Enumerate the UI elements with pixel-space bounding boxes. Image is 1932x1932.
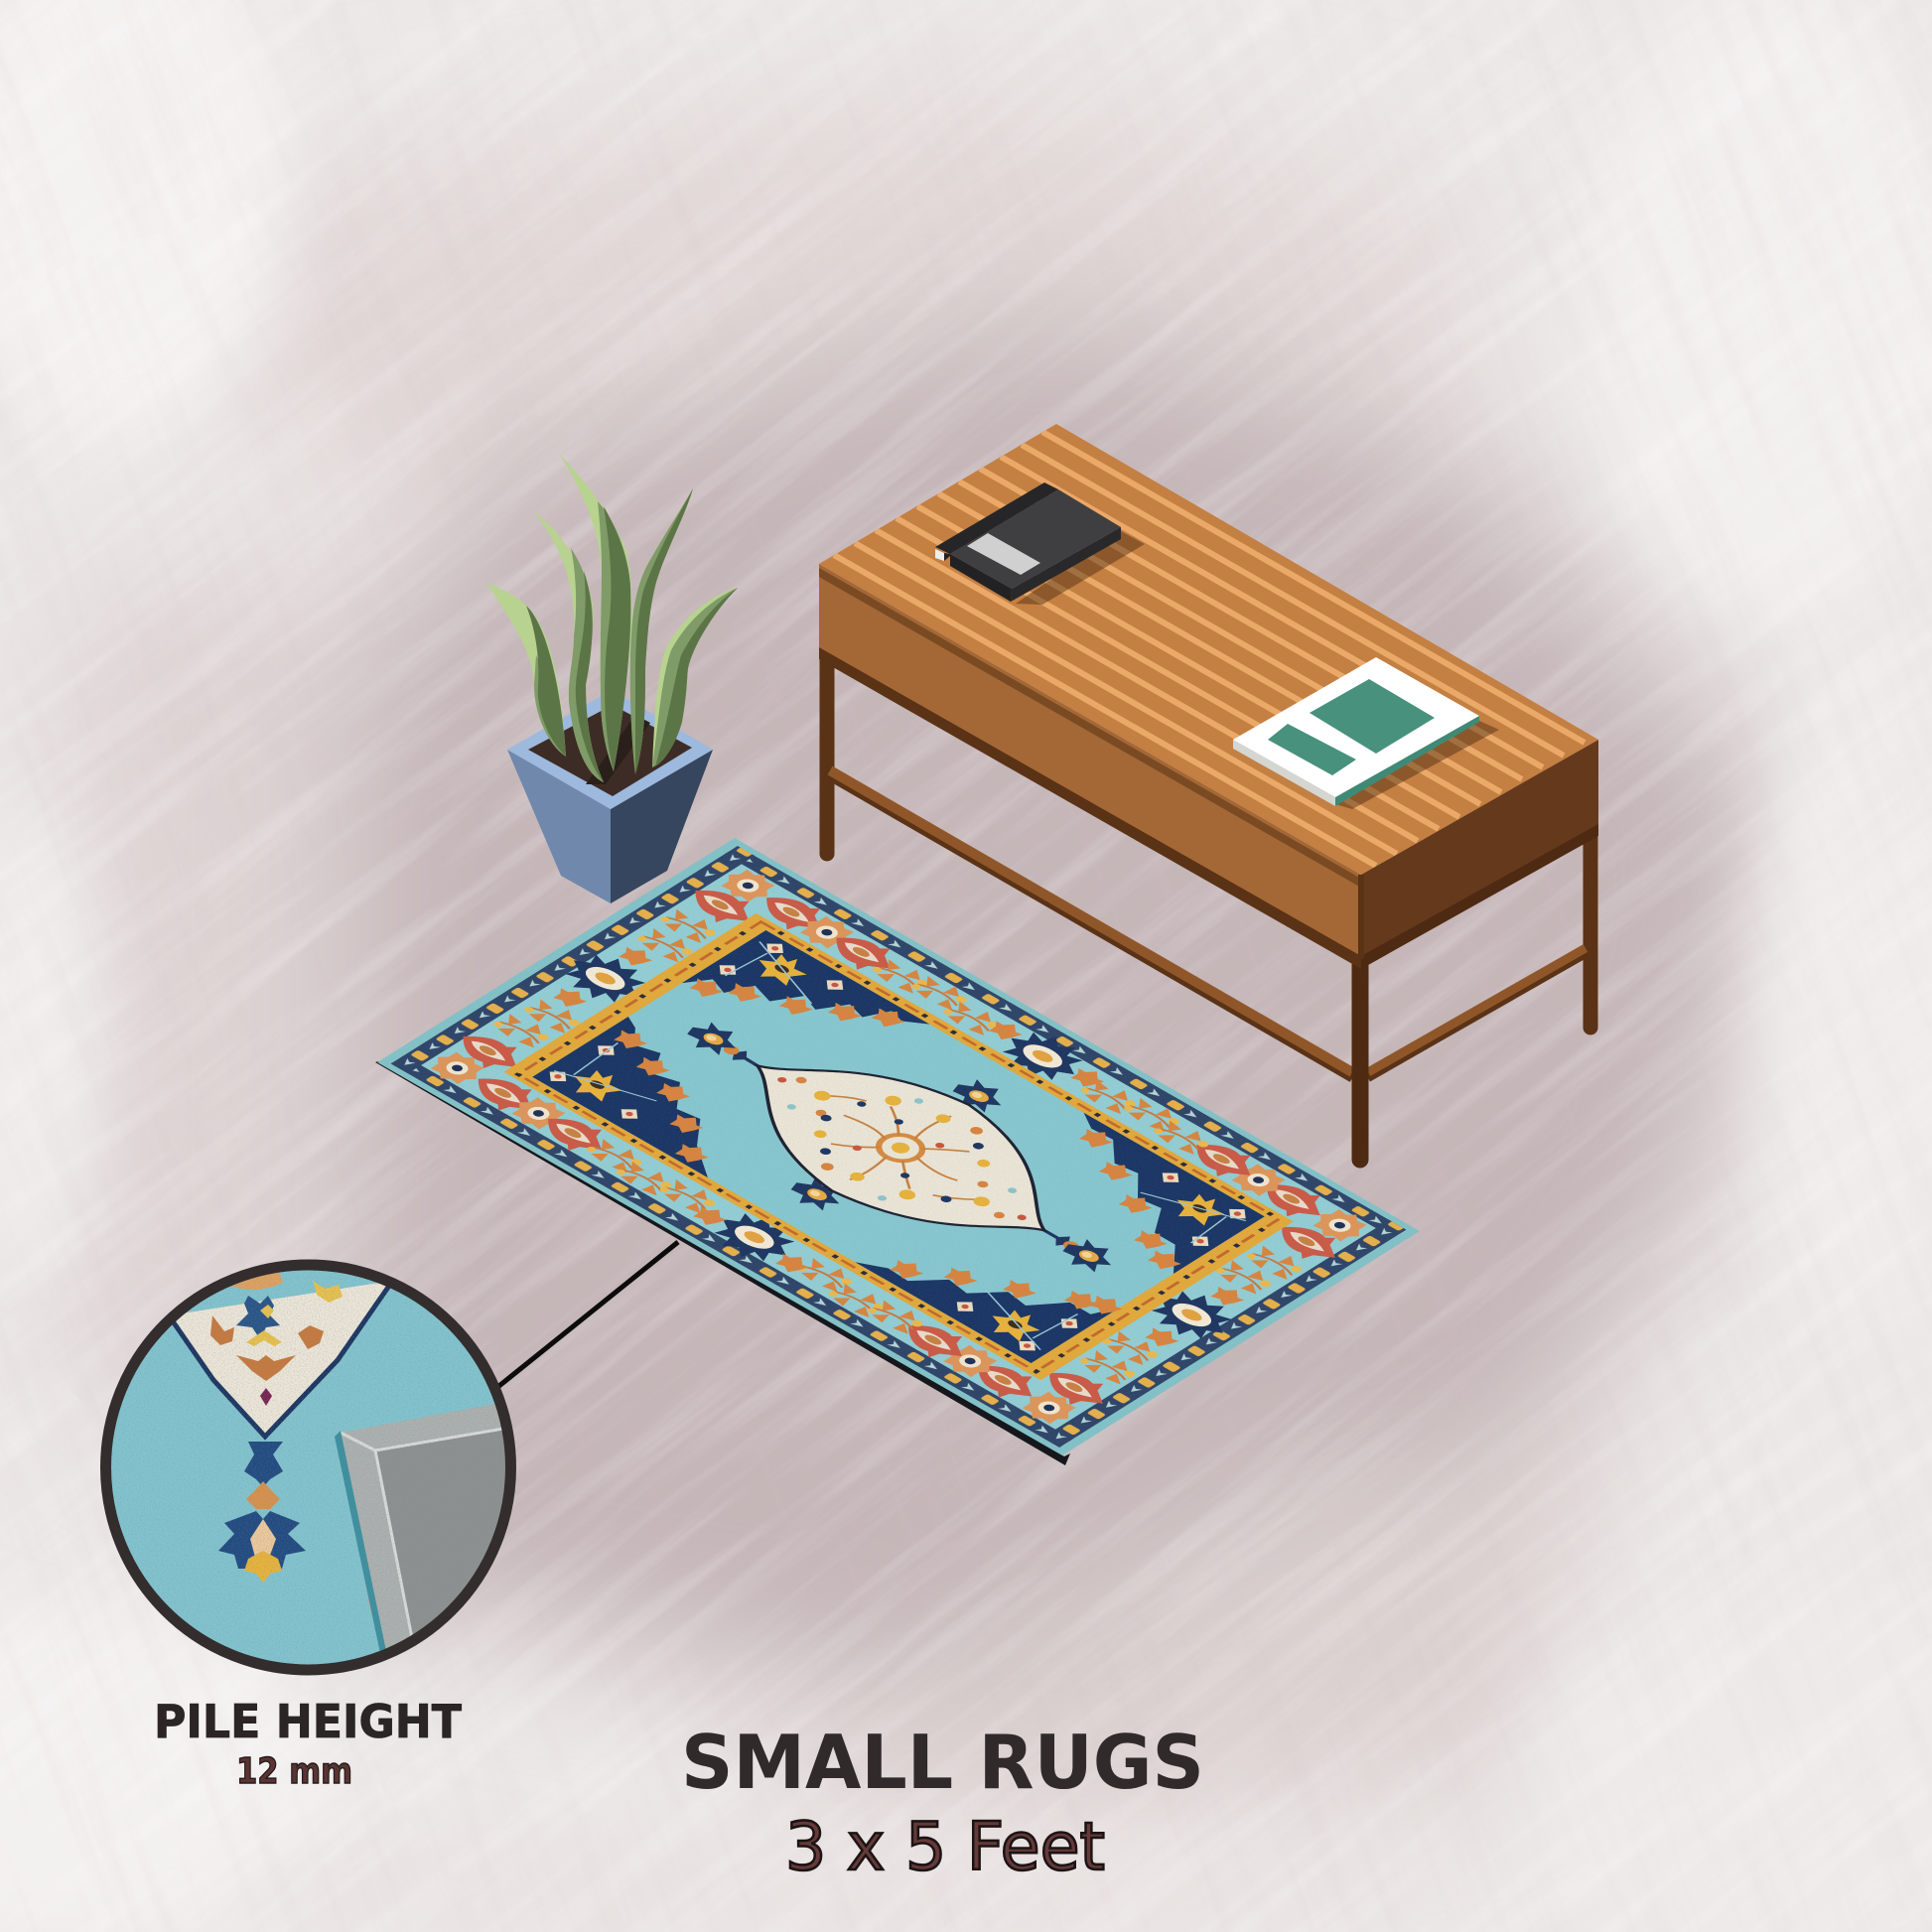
rug wool grain (377, 838, 1420, 1455)
label: pile height: 12 mm (236, 1751, 352, 1792)
icon: potted plant (486, 454, 738, 903)
dark book (935, 483, 1145, 605)
pile grain (111, 1271, 505, 1664)
connector line (495, 1242, 678, 1389)
coffee table (819, 424, 1598, 1160)
plant leaves (486, 454, 738, 782)
label: pile height: PILE HEIGHT (154, 1695, 463, 1748)
rug guard border (391, 846, 1406, 1448)
magazine (1233, 657, 1499, 809)
zoom circle: pile height detail (99, 1261, 536, 1688)
rug pendants (598, 968, 1204, 1326)
subtitle: size: 3 x 5 Feet (785, 1808, 1105, 1885)
title: small rugs: SMALL RUGS (681, 1719, 1204, 1806)
patterned rug (375, 838, 1420, 1465)
medallion tip (169, 1271, 392, 1437)
folded rug corner, grey backing (335, 1404, 505, 1651)
plant pot (507, 690, 713, 903)
label: pile height (154, 1695, 463, 1792)
pendant motif (218, 1442, 306, 1583)
rug center medallion (689, 1023, 1113, 1274)
rug corner spandrels (532, 930, 1268, 1365)
rug floral band motifs (407, 856, 1390, 1438)
table body panels (819, 564, 1598, 969)
table legs and stretchers (827, 645, 1590, 1160)
rug shadow edge (375, 1061, 1070, 1465)
rug gold frame and field (503, 913, 1294, 1380)
rug body (377, 838, 1420, 1455)
striped table top (819, 424, 1598, 875)
